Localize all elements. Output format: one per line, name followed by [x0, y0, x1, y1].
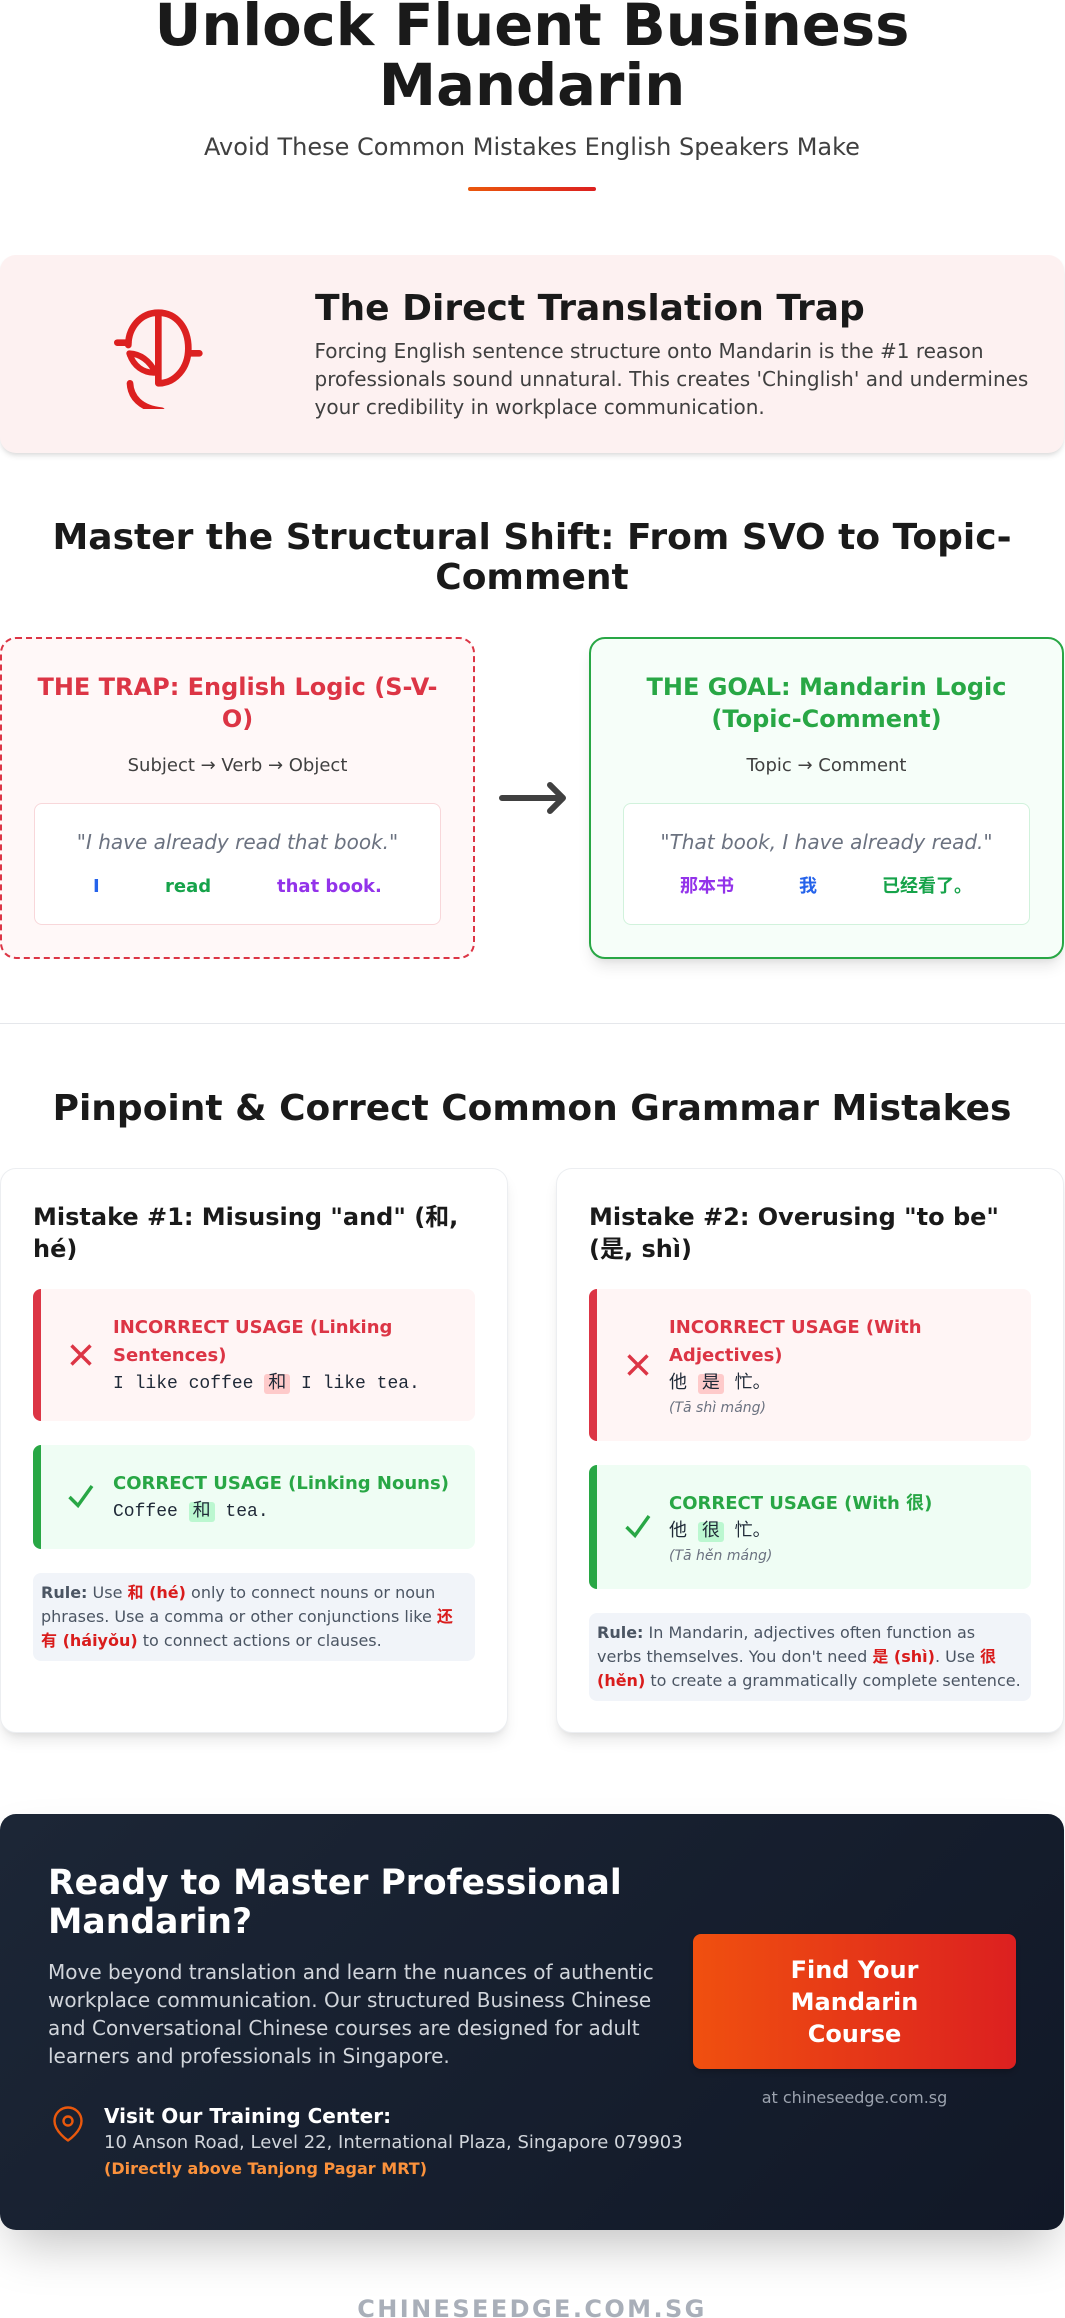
- header: [155, 0, 909, 191]
- heading: structural shift: [52, 516, 1012, 598]
- word: verb: read: [165, 876, 211, 897]
- mrt note: (Directly above Tanjong Pagar MRT): [104, 2159, 427, 2178]
- panel: direct translation trap: [0, 255, 1064, 453]
- cta button: Mandarin: [791, 1988, 918, 2016]
- panel: the goal: [589, 637, 1064, 959]
- training center address: [104, 2104, 683, 2178]
- correct label: CORRECT USAGE (Linking Nouns): [113, 1473, 449, 1494]
- trap title: O): [222, 704, 253, 732]
- trap description: [314, 339, 1028, 419]
- cta description: [48, 1960, 654, 2068]
- word: comment: 已经看了。: [882, 876, 972, 897]
- goal example: [623, 803, 1030, 925]
- incorrect example: 他 是 忙。: [669, 1374, 771, 1394]
- word: subject: 我: [799, 876, 817, 897]
- icon: location pin: [53, 2106, 83, 2142]
- rule note: [33, 1573, 475, 1661]
- rule note: Rule: In Mandarin, adjectives often function as: [597, 1623, 975, 1642]
- trap description: Forcing English sentence structure onto Mandarin is the #1 reason: [314, 339, 984, 363]
- cta url: at chineseedge.com.sg: [762, 2088, 947, 2107]
- incorrect label: [113, 1317, 392, 1366]
- correct label: CORRECT USAGE (With 很): [669, 1493, 932, 1514]
- mistake 1 heading: Mistake #1: Misusing "and" (和,: [33, 1203, 458, 1231]
- panel: mistake 1: [0, 1168, 508, 1733]
- goal title: THE GOAL: Mandarin Logic: [647, 672, 1006, 700]
- correct example: Coffee 和 tea.: [113, 1502, 269, 1522]
- word: subject: I: [93, 876, 100, 897]
- correct usage: [33, 1445, 475, 1549]
- address heading: Visit Our Training Center:: [104, 2104, 391, 2128]
- icon: check: [68, 1485, 94, 1508]
- subtitle: Avoid These Common Mistakes English Speakers Make: [204, 133, 860, 161]
- rule note: (hěn) to create a grammatically complete sentence.: [597, 1671, 1021, 1690]
- incorrect pinyin: (Tā shì máng): [669, 1400, 766, 1416]
- address: 10 Anson Road, Level 22, International Plaza, Singapore 079903: [104, 2132, 683, 2153]
- mistake 1 heading: [33, 1203, 458, 1263]
- correct example: 他 很 忙。: [669, 1522, 771, 1542]
- correct pinyin: (Tā hěn máng): [669, 1548, 772, 1564]
- accent underline: [468, 187, 596, 191]
- rule note: verbs themselves. You don't need 是 (shì). Use 很: [597, 1647, 996, 1666]
- incorrect label: INCORRECT USAGE (Linking: [113, 1317, 392, 1338]
- mistake 2 heading: (是, shì): [589, 1235, 692, 1263]
- heading: grammar mistakes: Pinpoint & Correct Common Grammar Mistakes: [53, 1088, 1011, 1128]
- heading: structural shift: Master the Structural Shift: From SVO to Topic-: [52, 516, 1012, 558]
- word: topic: 那本书: [680, 876, 734, 897]
- incorrect usage: [589, 1289, 1031, 1441]
- incorrect label: Sentences): [113, 1345, 226, 1366]
- arrow: [499, 782, 566, 814]
- icon: cross: [70, 1344, 92, 1366]
- icon: check: [625, 1515, 650, 1538]
- trap description: your credibility in workplace communication.: [314, 395, 765, 419]
- mistake 2 heading: [589, 1203, 999, 1263]
- divider: [0, 1023, 1065, 1024]
- cta button: Course: [808, 2020, 901, 2048]
- cta description: learners and professionals in Singapore.: [48, 2044, 450, 2068]
- cta heading: [48, 1863, 622, 1942]
- title: Mandarin: [379, 52, 685, 119]
- panel: the trap: [0, 637, 475, 959]
- title: [155, 0, 909, 119]
- goal title: (Topic-Comment): [711, 704, 942, 732]
- rule note: 有 (háiyǒu) to connect actions or clauses.: [41, 1631, 382, 1650]
- cta description: workplace communication. Our structured Business Chinese: [48, 1988, 651, 2012]
- panel: mistake 2: [556, 1168, 1064, 1733]
- trap description: professionals sound unnatural. This creates 'Chinglish' and undermines: [314, 367, 1028, 391]
- trap title: [37, 672, 438, 732]
- mistake 1 heading: hé): [33, 1235, 77, 1263]
- panel: call to action: [0, 1814, 1064, 2230]
- heading: structural shift: Comment: [435, 556, 629, 598]
- restructured sentence: "That book, I have already read.": [660, 830, 993, 854]
- trap title: THE TRAP: English Logic (S-V-: [37, 672, 438, 700]
- rule note: phrases. Use a comma or other conjunctions like 还: [41, 1607, 453, 1626]
- cta heading: Mandarin?: [48, 1902, 252, 1942]
- incorrect example: I like coffee 和 I like tea.: [113, 1374, 420, 1394]
- cta description: and Conversational Chinese courses are designed for adult: [48, 2016, 640, 2040]
- icon: cross: [627, 1354, 649, 1376]
- incorrect label: INCORRECT USAGE (With: [669, 1317, 922, 1338]
- cta button: [693, 1934, 1016, 2069]
- trap example: [34, 803, 441, 925]
- icon: translation trap symbol: [114, 309, 203, 409]
- goal title: [646, 672, 1006, 732]
- trap heading: The Direct Translation Trap: [315, 288, 865, 329]
- mistake 2 heading: Mistake #2: Overusing "to be": [589, 1203, 999, 1231]
- incorrect label: Adjectives): [669, 1345, 783, 1366]
- cta button: Find Your: [791, 1956, 918, 1984]
- english sentence: "I have already read that book.": [77, 830, 398, 854]
- incorrect label: [669, 1317, 922, 1366]
- cta heading: Ready to Master Professional: [48, 1863, 622, 1903]
- cta description: Move beyond translation and learn the nuances of authentic: [48, 1960, 654, 1984]
- goal formula: Topic → Comment: [746, 755, 906, 776]
- word: object: that book.: [277, 876, 382, 897]
- trap formula: Subject → Verb → Object: [128, 755, 347, 776]
- rule note: [589, 1613, 1031, 1701]
- incorrect usage: [33, 1289, 475, 1421]
- rule note: Rule: Use 和 (hé) only to connect nouns or noun: [41, 1583, 435, 1602]
- correct usage: [589, 1465, 1031, 1589]
